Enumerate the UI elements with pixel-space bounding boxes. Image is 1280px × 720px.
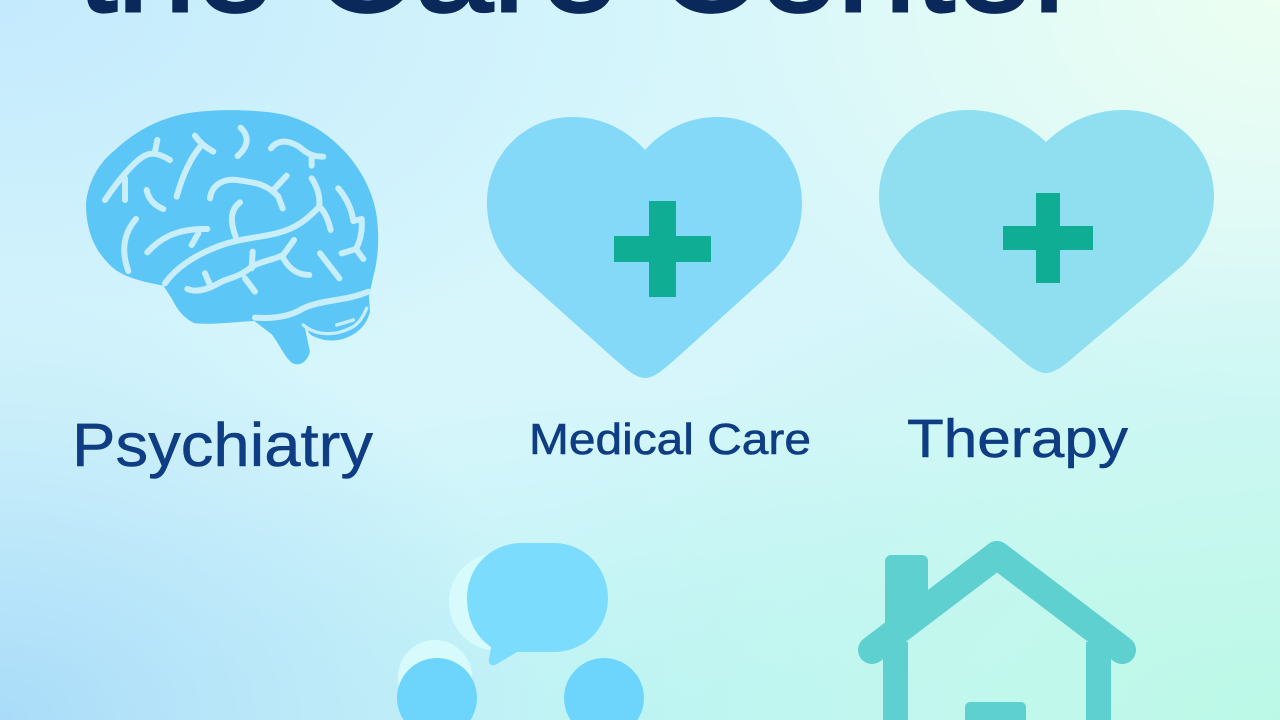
label: Psychiatry: Psychiatry <box>72 411 374 479</box>
icon: house <box>872 555 1122 720</box>
label: Medical Care: Medical Care <box>529 415 811 464</box>
icon: heart with cross, medical care <box>487 117 802 378</box>
icon: counseling speech bubble and people <box>397 543 644 720</box>
icon: heart with cross, therapy <box>879 110 1214 373</box>
icon: brain <box>86 110 378 364</box>
label: Therapy: Therapy <box>907 409 1128 469</box>
